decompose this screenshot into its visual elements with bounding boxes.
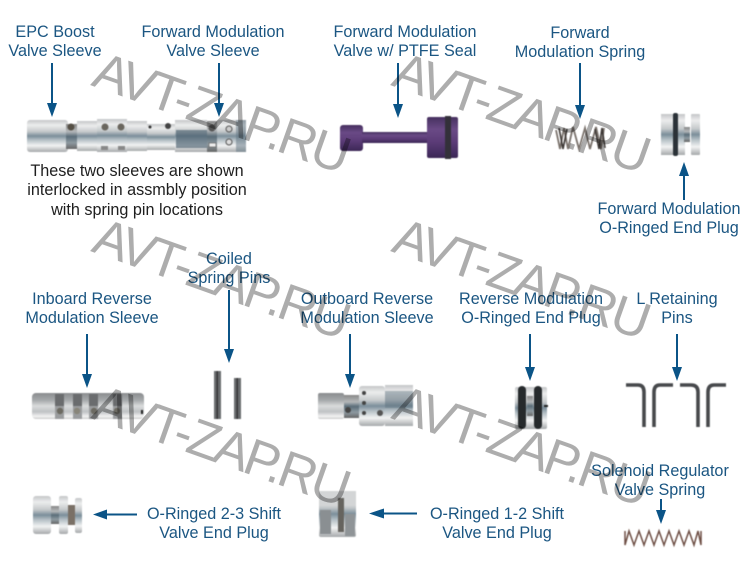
watermarks	[86, 42, 658, 519]
part: solenoid regulator valve spring	[625, 531, 701, 545]
label: forward modulation spring: Modulation Spring	[515, 43, 645, 61]
label: O-ringed 2-3 shift valve end plug: O-Ringed 2-3 Shift	[147, 505, 281, 523]
label: L retaining pins: L Retaining	[636, 290, 718, 308]
watermarks: AVT-ZAP.RU	[386, 208, 658, 352]
label: inboard reverse modulation sleeve: Inboard Reverse	[32, 290, 152, 308]
watermarks: AVT-ZAP.RU	[86, 208, 358, 352]
label: solenoid regulator valve spring: Solenoid Regulator	[591, 462, 729, 480]
label: reverse modulation O-ringed end plug: Reverse Modulation	[459, 290, 603, 308]
label: coiled spring pins: Coiled	[206, 250, 252, 268]
watermarks: AVT-ZAP.RU	[86, 42, 358, 186]
watermarks: AVT-ZAP.RU	[86, 375, 358, 519]
part: coiled spring pins	[214, 371, 241, 419]
part: forward modulation spring	[556, 127, 605, 149]
label: O-ringed 1-2 shift valve end plug: O-Ringed 1-2 Shift	[430, 505, 564, 523]
label: O-ringed 1-2 shift valve end plug: Valve End Plug	[442, 524, 552, 542]
watermarks: AVT-ZAP.RU	[386, 42, 658, 186]
label: forward modulation valve sleeve: Valve Sleeve	[166, 42, 260, 60]
label: EPC boost valve sleeve: Valve Sleeve	[8, 42, 102, 60]
label: reverse modulation O-ringed end plug: O-Ringed End Plug	[461, 309, 601, 327]
label: EPC boost valve sleeve: EPC Boost	[15, 23, 95, 41]
arrows	[47, 63, 689, 524]
part: EPC boost and forward modulation sleeves	[27, 119, 246, 152]
label: outboard reverse modulation sleeve: Modulation Sleeve	[300, 309, 434, 327]
label: forward modulation O-ringed end plug: O-Ringed End Plug	[599, 219, 739, 237]
label: L retaining pins: Pins	[661, 309, 693, 327]
part: L retaining pins	[626, 385, 726, 427]
text block: sleeve note: with spring pin locations	[50, 201, 223, 219]
label: outboard reverse modulation sleeve: Outboard Reverse	[301, 290, 433, 308]
part: O-ringed 1-2 shift valve end plug	[319, 491, 356, 537]
text block: sleeve note: These two sleeves are shown	[30, 162, 244, 180]
watermarks: AVT-ZAP.RU	[386, 375, 658, 519]
label: solenoid regulator valve spring: Valve Spring	[615, 481, 705, 499]
text block: sleeve note: interlocked in assmbly position	[27, 181, 247, 199]
label: forward modulation valve with PTFE seal: Valve w/ PTFE Seal	[334, 42, 476, 60]
part: forward modulation valve with PTFE seal	[340, 116, 458, 159]
label: forward modulation valve with PTFE seal: Forward Modulation	[333, 23, 477, 41]
label: inboard reverse modulation sleeve: Modulation Sleeve	[25, 309, 159, 327]
part: reverse modulation O-ringed end plug	[515, 386, 548, 429]
part: inboard reverse modulation sleeve	[32, 393, 144, 419]
label: forward modulation O-ringed end plug: Forward Modulation	[597, 200, 741, 218]
part: outboard reverse modulation sleeve	[318, 385, 413, 426]
label: forward modulation spring: Forward	[550, 24, 610, 42]
label: forward modulation valve sleeve: Forward Modulation	[141, 23, 285, 41]
part: O-ringed 2-3 shift valve end plug	[33, 496, 82, 534]
part: forward modulation O-ringed end plug	[661, 113, 700, 156]
label: O-ringed 2-3 shift valve end plug: Valve End Plug	[159, 524, 269, 542]
label: coiled spring pins: Spring Pins	[188, 269, 270, 287]
